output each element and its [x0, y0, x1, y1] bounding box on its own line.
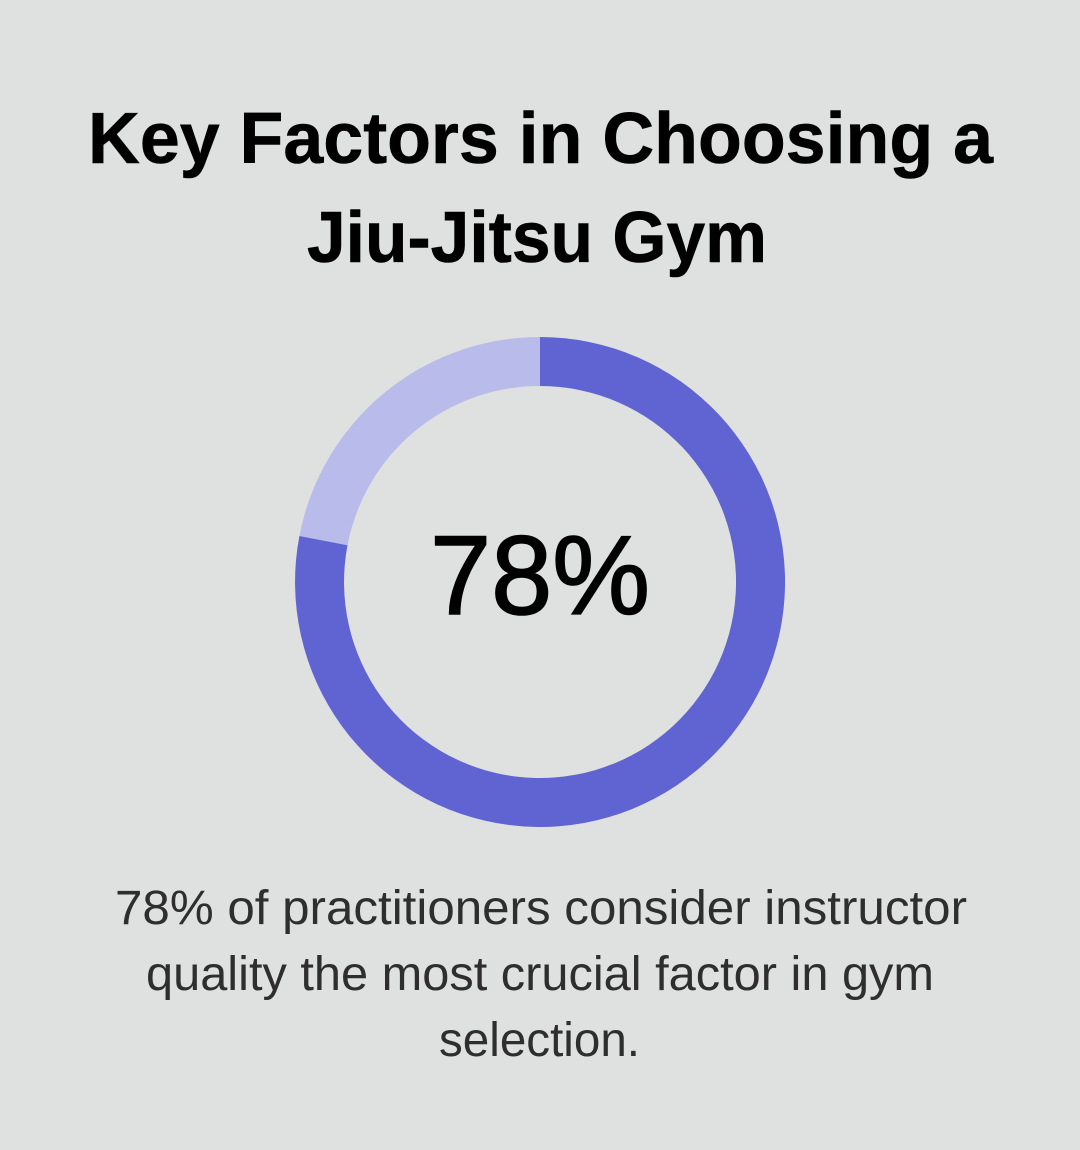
- 78 percent segment: [295, 337, 785, 827]
- remaining 22 percent segment: [299, 337, 540, 545]
- description text: [115, 882, 967, 1067]
- title: Jiu-Jitsu Gym: [307, 198, 767, 278]
- center value: 78%: [430, 513, 650, 638]
- description text: selection.: [439, 1014, 640, 1067]
- title: [88, 99, 994, 278]
- description text: quality the most crucial factor in gym: [146, 948, 934, 1001]
- title: Key Factors in Choosing a: [88, 99, 994, 179]
- description text: 78% of practitioners consider instructor: [115, 882, 967, 935]
- donut chart: 78 percent: [295, 337, 785, 827]
